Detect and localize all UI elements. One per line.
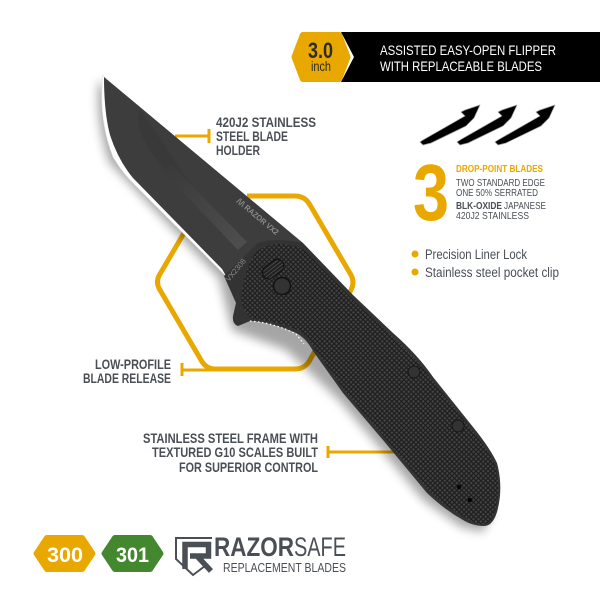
header banner: ASSISTED EASY-OPEN FLIPPER bbox=[380, 42, 556, 58]
RazorSafe wordmark bbox=[214, 532, 346, 575]
bullet list: Stainless steel pocket clip bbox=[425, 265, 559, 280]
leader: blade holder bbox=[175, 129, 209, 143]
label: blade holder: STEEL BLADE bbox=[216, 128, 288, 144]
lanyard holes bbox=[457, 485, 472, 502]
header hexagon: blade length bbox=[292, 32, 350, 82]
header hexagon: blade length: inch bbox=[311, 58, 331, 74]
hexagon outline behind knife bbox=[158, 196, 353, 369]
header hexagon: blade length: 3.0 bbox=[308, 38, 333, 63]
RazorSafe wordmark: SAFE bbox=[294, 532, 346, 562]
blade fuller bbox=[138, 109, 247, 250]
label: blade release: LOW-PROFILE bbox=[95, 356, 171, 372]
blade white edge bbox=[102, 75, 240, 276]
label: blade release: BLADE RELEASE bbox=[83, 370, 171, 386]
label: blade holder: 420J2 STAINLESS bbox=[216, 114, 316, 130]
textured handle scale bbox=[241, 244, 498, 524]
blade model text: VX2308 bbox=[224, 257, 248, 283]
label: frame: STAINLESS STEEL FRAME WITH bbox=[143, 430, 318, 446]
label: frame: TEXTURED G10 SCALES BUILT bbox=[152, 444, 318, 460]
label: frame: FOR SUPERIOR CONTROL bbox=[179, 459, 318, 475]
label: frame bbox=[143, 430, 318, 475]
big numeral 3: 3 bbox=[413, 148, 449, 237]
handle screw 1 bbox=[408, 366, 420, 378]
badge: 301 bbox=[102, 535, 164, 572]
blade spec text: TWO STANDARD EDGE bbox=[456, 177, 545, 189]
label: blade holder bbox=[216, 114, 316, 158]
badge: 300: 300 bbox=[47, 544, 83, 567]
handle screw 2 bbox=[452, 420, 464, 432]
bullet list: Precision Liner Lock bbox=[425, 247, 527, 262]
badge: 300 bbox=[34, 535, 96, 572]
blade spec text: JAPANESE bbox=[504, 200, 546, 212]
leader: frame bbox=[328, 446, 395, 458]
blade spec text: 420J2 STAINLESS bbox=[456, 210, 529, 222]
RazorSafe wordmark: REPLACEMENT BLADES bbox=[223, 561, 346, 575]
pivot screw bbox=[274, 278, 290, 294]
header banner: WITH REPLACEABLE BLADES bbox=[380, 58, 542, 74]
handle jimping bbox=[250, 321, 304, 344]
RazorSafe shield logo bbox=[176, 538, 212, 575]
badge: 301: 301 bbox=[116, 544, 149, 567]
blade body bbox=[104, 77, 303, 300]
blade spec text: BLK-OXIDE bbox=[456, 200, 502, 212]
label: blade holder: HOLDER bbox=[216, 142, 260, 158]
fuller highlight bbox=[162, 165, 247, 250]
replacement blade icons bbox=[420, 105, 555, 145]
knife bbox=[98, 75, 500, 532]
blade spec text bbox=[456, 163, 546, 222]
leader: blade release bbox=[182, 363, 212, 376]
blade spec text: ONE 50% SERRATED bbox=[456, 187, 538, 199]
blade logo: /\/\ RAZOR VX2 bbox=[235, 197, 281, 237]
bullet list bbox=[412, 247, 559, 280]
thumb stud slot bbox=[260, 256, 286, 282]
RazorSafe wordmark: RAZOR bbox=[214, 532, 294, 562]
header banner bbox=[341, 32, 600, 82]
blade spec text: DROP-POINT BLADES bbox=[456, 163, 543, 175]
frame and bolster bbox=[224, 240, 500, 526]
label: blade release bbox=[83, 356, 171, 386]
